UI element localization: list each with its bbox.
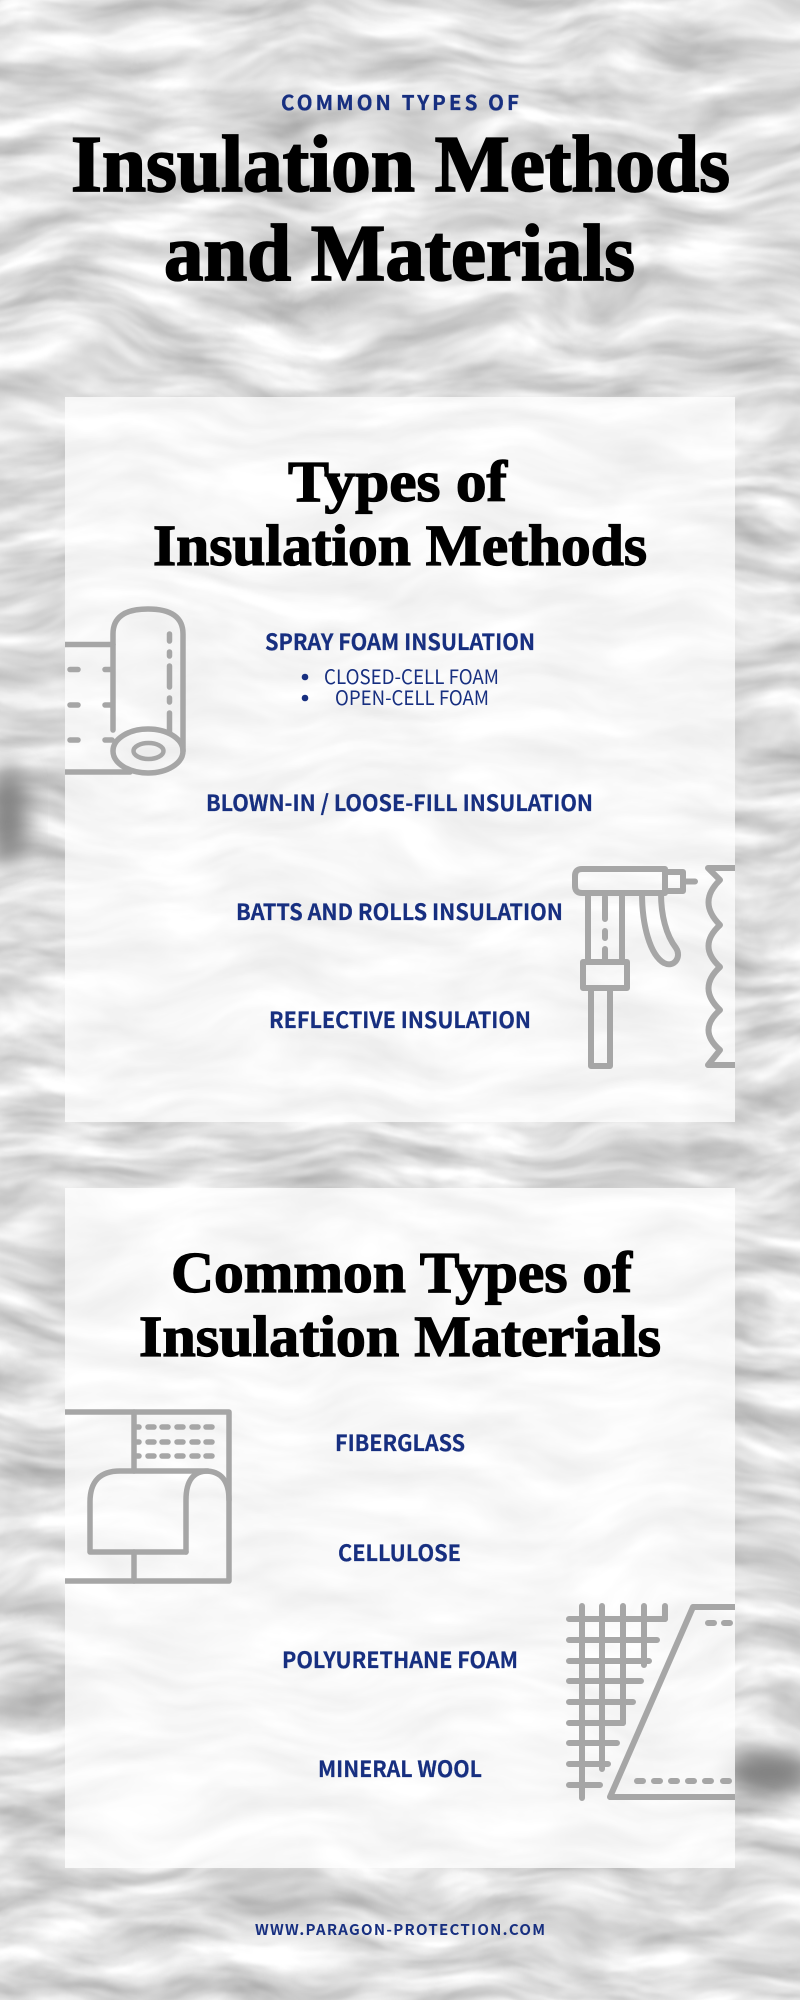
item: fiberglass: FIBERGLASS	[335, 1426, 465, 1458]
heading: types of insulation methods: Insulation Methods	[153, 513, 647, 578]
item: reflective insulation: REFLECTIVE INSULATION	[269, 1003, 531, 1035]
panel: types of insulation methods	[60, 397, 740, 1122]
heading: common types of insulation materials	[139, 1240, 661, 1369]
item: batts and rolls insulation: BATTS AND ROLLS INSULATION	[236, 895, 563, 927]
icon: fiberglass sheet	[60, 1412, 229, 1581]
sub-list: foam types	[302, 661, 499, 711]
main title	[71, 121, 730, 298]
panel: common types of insulation materials	[60, 1188, 740, 1868]
icon: mesh and foam board	[569, 1606, 740, 1798]
heading: common types of insulation materials: Insulation Materials	[139, 1304, 661, 1369]
small title: common types of: COMMON TYPES OF	[281, 86, 519, 116]
item: mineral wool: MINERAL WOOL	[318, 1752, 482, 1784]
main title: Insulation Methods	[71, 121, 730, 209]
heading: types of insulation methods: Types of	[288, 449, 508, 514]
item: cellulose: CELLULOSE	[338, 1536, 461, 1568]
item: polyurethane foam: POLYURETHANE FOAM	[282, 1643, 518, 1675]
sub-list: foam types: CLOSED-CELL FOAM	[324, 661, 499, 690]
icon: spray foam gun	[575, 868, 740, 1066]
item: blown-in insulation: BLOWN-IN / LOOSE-FILL INSULATION	[206, 786, 593, 818]
item: spray foam insulation: SPRAY FOAM INSULATION	[265, 625, 535, 657]
main title: and Materials	[164, 210, 635, 298]
footer: website: WWW.PARAGON-PROTECTION.COM	[255, 1919, 545, 1940]
heading: common types of insulation materials: Common Types of	[171, 1240, 633, 1305]
item: spray foam insulation	[265, 625, 535, 711]
icon: insulation roll	[60, 609, 183, 773]
heading: types of insulation methods	[153, 449, 647, 578]
sub-list: foam types: OPEN-CELL FOAM	[335, 682, 489, 711]
